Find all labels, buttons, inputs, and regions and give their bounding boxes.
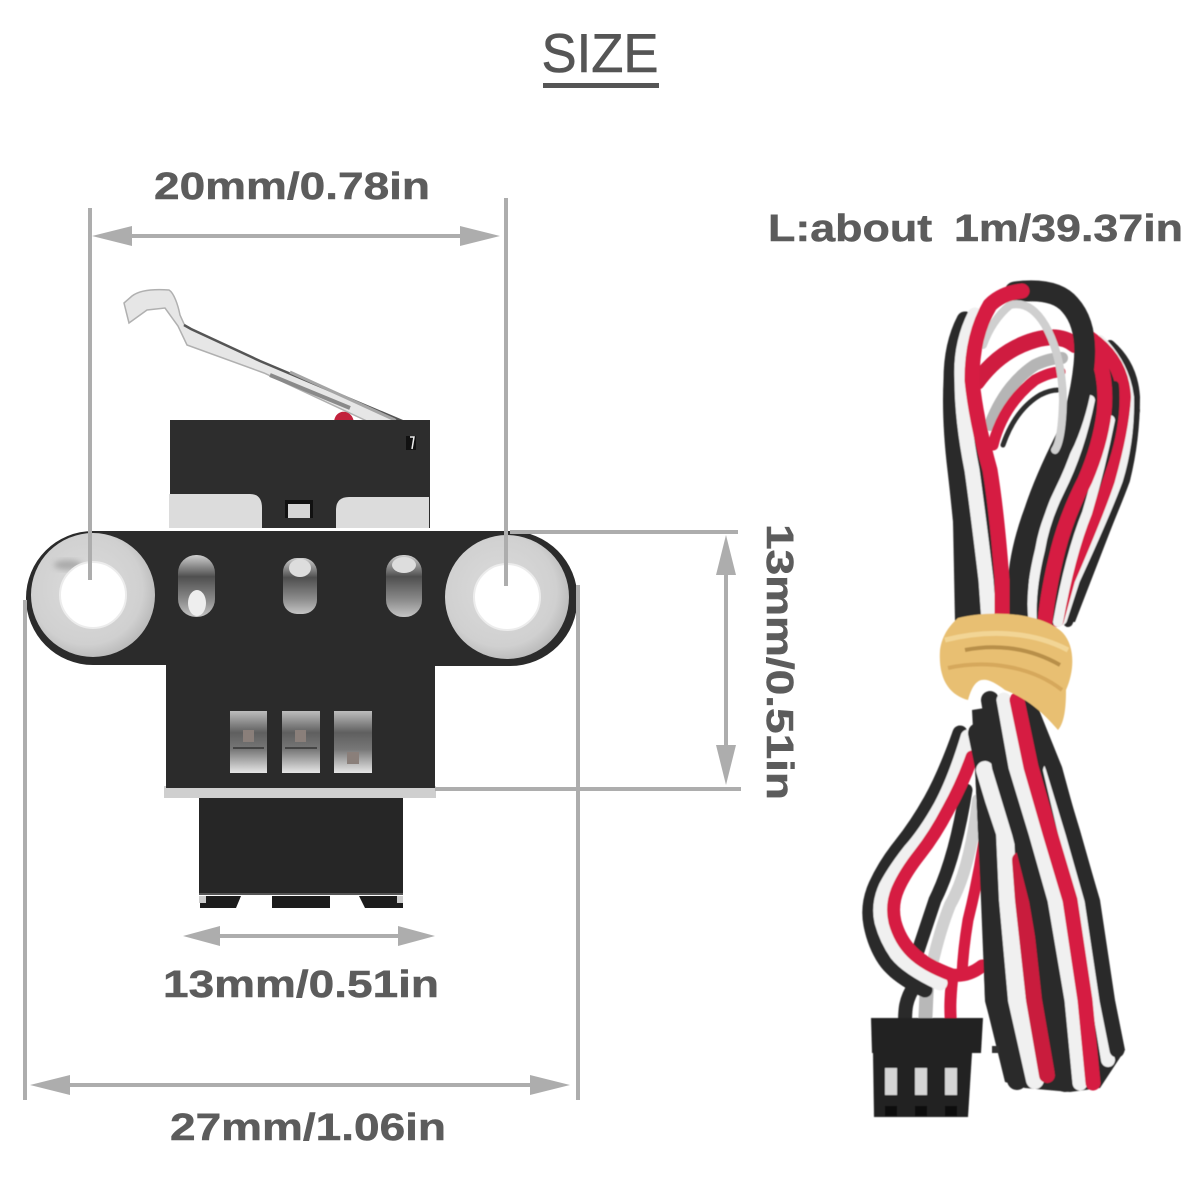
title: SIZE (542, 22, 658, 84)
lower wire bundle (972, 700, 1125, 1092)
dimension: 27mm (25, 585, 578, 1149)
lower left loop and connector wires (870, 733, 984, 1024)
rubber band (940, 614, 1072, 730)
switch body (169, 420, 430, 528)
red actuator button (334, 412, 354, 423)
dimension: 13mm height (435, 524, 800, 800)
dimension: 27mm: 27mm/1.06in (170, 1107, 446, 1149)
right mounting washer (445, 535, 569, 659)
3-pin connector (871, 1018, 999, 1117)
wire harness photo (870, 291, 1140, 1117)
SMD pads (230, 711, 372, 773)
PCB board (26, 531, 578, 788)
upper wire loops (945, 291, 1140, 622)
PCB edge (164, 786, 436, 798)
dimension: 20mm (90, 166, 506, 586)
left mounting washer (31, 533, 155, 657)
dimension: 13mm width: 13mm/0.51in (163, 964, 439, 1006)
cable length label: L:about 1m/39.37in (768, 208, 1183, 250)
dimension: 13mm height: 13mm/0.51in (758, 524, 800, 800)
dimension: 20mm: 20mm/0.78in (154, 166, 430, 208)
lower connector body (199, 797, 403, 908)
dimension: 13mm width (163, 926, 439, 1006)
lever arm (124, 290, 407, 423)
solder joints (178, 555, 422, 617)
switch module photo (26, 290, 578, 908)
